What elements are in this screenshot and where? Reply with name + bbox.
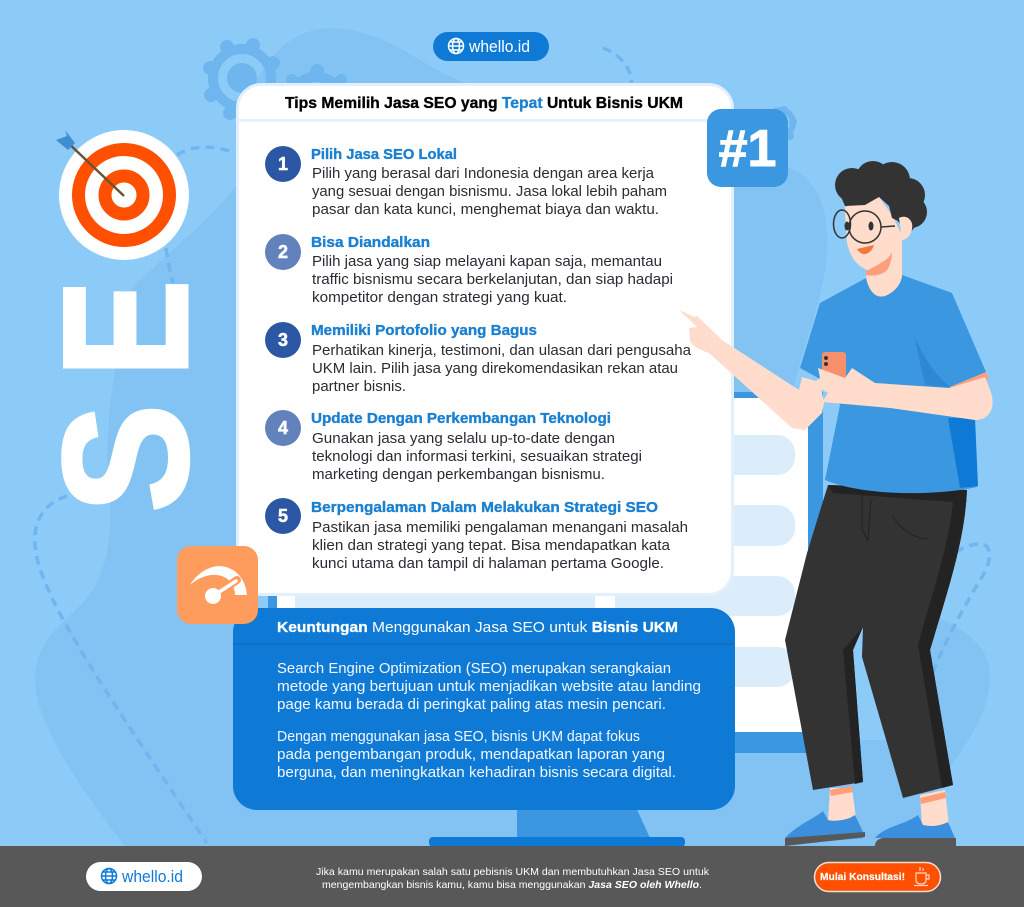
tip 5: klien dan strategi yang tepat. Bisa mendapatkan kata (312, 538, 671, 554)
tip 5: Berpengalaman Dalam Melakukan Strategi SEO (311, 500, 658, 516)
gear right (767, 106, 797, 140)
footer band (0, 846, 1024, 907)
badge: #1: #1 (719, 120, 776, 178)
card: tips (238, 84, 732, 594)
letter S: S (27, 404, 226, 513)
badge: speedometer icon (177, 546, 258, 624)
pants (785, 485, 967, 798)
tip 3: Memiliki Portofolio yang Bagus (311, 323, 537, 339)
tip 5: 5 (278, 506, 288, 526)
tip 5: kunci utama dan tampil di halaman pertama Google. (312, 556, 664, 572)
person illustration (679, 161, 993, 846)
ear (899, 217, 912, 240)
panel paragraph 1 (277, 661, 701, 713)
tip 2: Pilih jasa yang siap melayani kapan saja, memantau (312, 254, 662, 270)
tip 1: 1 (278, 154, 288, 174)
icon: coffee cup (914, 867, 929, 886)
tip 3: partner bisnis. (312, 379, 406, 395)
tip 4: 4 (278, 418, 288, 438)
neck and face (845, 197, 902, 297)
glasses (834, 210, 895, 243)
footer message: mengembangkan bisnis kamu, kamu bisa menggunakan Jasa SEO oleh Whello. (322, 879, 702, 891)
tip 2: 2 (278, 242, 288, 262)
arm: holding phone (812, 368, 993, 420)
eyes (844, 222, 874, 230)
panel paragraph 2: pada pengembangan produk, mendapatkan laporan yang (277, 747, 665, 763)
tip 1 (265, 146, 667, 218)
panel paragraph 1: page kamu berada di peringkat paling atas mesin pencari. (277, 697, 666, 713)
panel paragraph 2: Dengan menggunakan jasa SEO, bisnis UKM dapat fokus (277, 729, 640, 745)
arm: pointing (679, 310, 824, 430)
SEO big letters (27, 280, 226, 513)
tip 4: Gunakan jasa yang selalu up-to-date dengan (312, 431, 615, 447)
tip 3 (265, 322, 692, 395)
icon: globe footer (102, 868, 116, 884)
badge: #1 (707, 109, 788, 187)
top logo pill: whello.id (468, 38, 530, 56)
legs skin and shoes (785, 786, 956, 846)
tip 3: UKM lain. Pilih jasa yang direkomendasikan rekan atau (312, 361, 678, 377)
tip 1: yang sesuai dengan bisnismu. Jasa lokal lebih paham (312, 184, 667, 200)
top logo pill (433, 32, 549, 61)
tip 2: Bisa Diandalkan (311, 235, 430, 251)
phone (822, 352, 846, 380)
footer button: Mulai Konsultasi! (820, 871, 905, 883)
tip 4: teknologi dan informasi terkini, sesuaikan strategi (312, 449, 642, 465)
tip 3: Perhatikan kinerja, testimoni, dan ulasan dari pengusaha (312, 343, 692, 359)
tip 2: kompetitor dengan strategi yang kuat. (312, 290, 567, 306)
tip 5 (265, 498, 688, 572)
tip 5: Pastikan jasa memiliki pengalaman menangani masalah (312, 520, 688, 536)
footer message: Jika kamu merupakan salah satu pebisnis UKM dan membutuhkan Jasa SEO untuk (316, 866, 710, 878)
footer logo: whello.id (121, 868, 183, 886)
gear large (203, 38, 282, 120)
panel paragraph 2: berguna, dan meningkatkan kehadiran bisnis secara digital. (277, 765, 676, 781)
footer button (814, 862, 940, 892)
hair (835, 161, 927, 240)
tip 4: marketing dengan perkembangan bisnismu. (312, 467, 605, 483)
panel paragraph 1: Search Engine Optimization (SEO) merupakan serangkaian (277, 661, 671, 677)
panel heading: Keuntungan Menggunakan Jasa SEO untuk Bisnis UKM (277, 619, 678, 636)
tip 4: Update Dengan Perkembangan Teknologi (311, 411, 611, 427)
footer logo (86, 862, 202, 891)
tip 1: pasar dan kata kunci, menghemat biaya dan waktu. (312, 202, 659, 218)
letter E: E (27, 280, 225, 377)
tip 3: 3 (278, 330, 288, 350)
tip 1: Pilih yang berasal dari Indonesia dengan area kerja (312, 166, 655, 182)
gear small (286, 64, 347, 133)
icon: globe (448, 38, 464, 54)
tip 2 (265, 234, 673, 306)
panel: keuntungan (233, 608, 735, 810)
gears (203, 38, 797, 140)
card title: Tips Memilih Jasa SEO yang Tepat Untuk Bisnis UKM (285, 95, 683, 112)
target icon (56, 130, 189, 260)
tip 4 (265, 410, 642, 483)
tip 2: traffic bisnismu secara berkelanjutan, dan siap hadapi (312, 272, 673, 288)
panel paragraph 2 (277, 729, 676, 781)
monitor behind cards (258, 392, 823, 847)
panel paragraph 1: metode yang bertujuan untuk menjadikan website atau landing (277, 679, 701, 695)
tip 1: Pilih Jasa SEO Lokal (311, 147, 457, 163)
footer message (316, 866, 710, 891)
shirt (800, 275, 989, 493)
